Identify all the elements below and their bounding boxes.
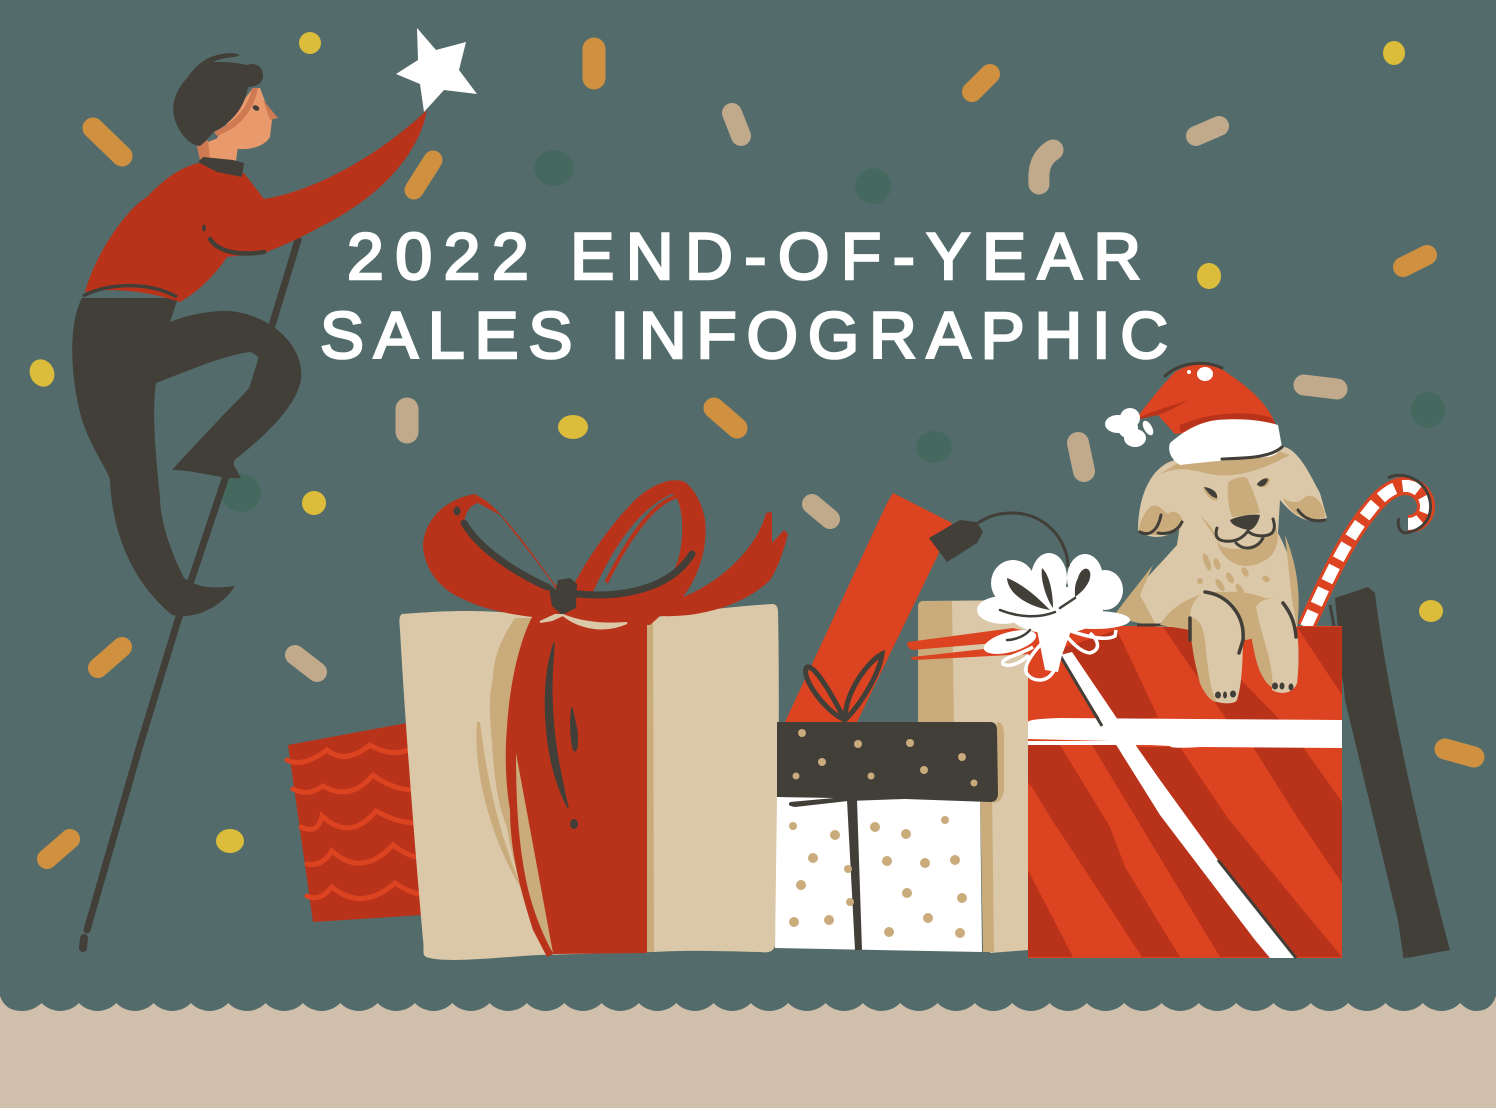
collar xyxy=(198,157,244,177)
body xyxy=(1113,447,1327,627)
illustration: red strips on back box xyxy=(907,628,1030,660)
nose xyxy=(1230,515,1260,530)
muzzle and chest xyxy=(1200,515,1278,566)
illustration: white bow on red gift xyxy=(977,553,1130,680)
legs xyxy=(1160,592,1296,640)
face xyxy=(210,88,272,149)
title: 2022 END-OF-YEAR xyxy=(347,219,1141,293)
ribbon marks xyxy=(545,643,568,808)
illustration: beige back box xyxy=(918,600,1028,953)
eyes xyxy=(1203,487,1218,500)
illustration: white polka-dot gift with dark lid xyxy=(775,654,998,952)
ears xyxy=(1139,505,1182,535)
ribbon band xyxy=(506,615,647,957)
bow xyxy=(423,480,788,625)
diagonal white ribbon xyxy=(1060,652,1295,958)
confetti xyxy=(25,32,1474,859)
illustration: large red gift with white ribbon xyxy=(1028,626,1342,958)
illustration: small red gift xyxy=(287,723,422,922)
hat pom-pom xyxy=(1105,408,1155,447)
illustration: man on ladder reaching for star xyxy=(72,28,477,948)
dark line on box edge xyxy=(1137,624,1190,626)
toes xyxy=(1215,682,1294,698)
illustration: large beige gift with red bow xyxy=(399,480,788,960)
footer band with scalloped edge xyxy=(0,980,1496,1108)
star xyxy=(396,28,477,112)
hair xyxy=(173,53,263,146)
mouth xyxy=(1216,519,1274,548)
title: SALES INFOGRAPHIC xyxy=(320,298,1168,372)
santa hat xyxy=(1135,364,1275,434)
ladder pole xyxy=(87,240,298,930)
neck xyxy=(197,130,240,161)
horizontal white ribbon xyxy=(1028,718,1342,748)
illustration: dark tall box xyxy=(1330,587,1450,958)
title xyxy=(320,219,1168,372)
illustration: candy cane xyxy=(1306,475,1431,627)
sweater xyxy=(85,110,427,302)
diagonal stripes xyxy=(1028,627,1342,957)
trousers xyxy=(72,298,301,616)
illustration: red tall ribbon gift with tag xyxy=(785,493,1068,722)
bow dark accents xyxy=(464,523,692,595)
illustration: puppy in santa hat xyxy=(1105,363,1327,703)
gift tan fold xyxy=(490,618,536,918)
